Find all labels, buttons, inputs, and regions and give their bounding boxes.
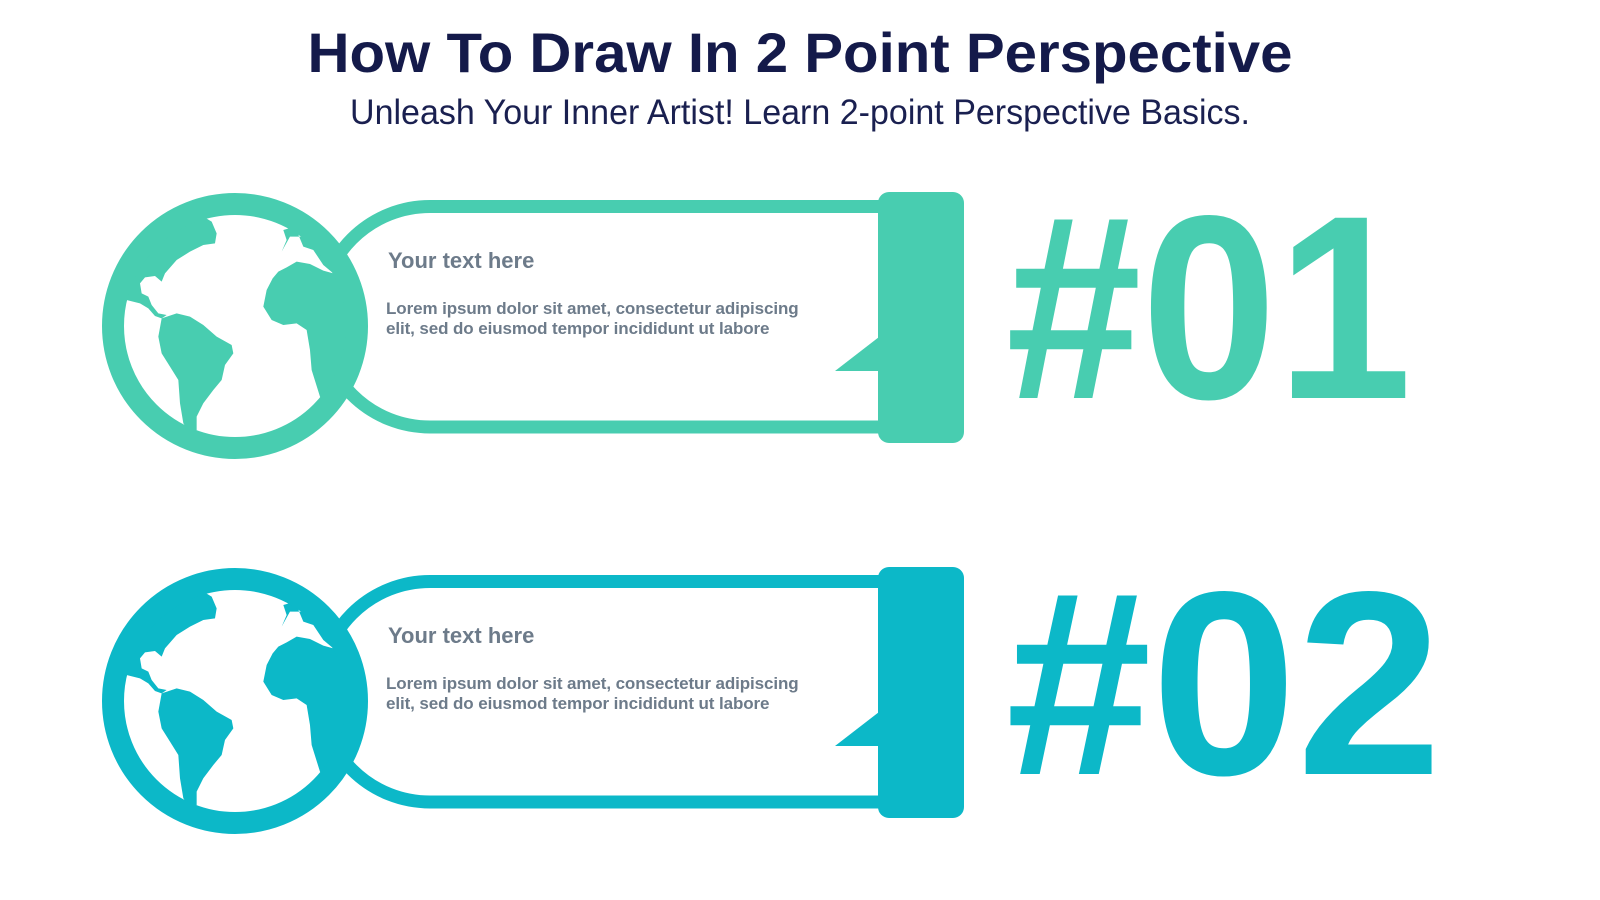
text box frame [320,192,964,443]
number #01: #01 [1006,161,1412,454]
body text: elit, sed do eiusmod tempor incididunt ut labore [386,694,769,713]
icon: globe [110,579,383,823]
text box frame [320,567,964,818]
body text: elit, sed do eiusmod tempor incididunt ut labore [386,319,769,338]
body text: Lorem ipsum dolor sit amet, consectetur adipiscing [386,299,799,318]
icon: globe [110,204,383,448]
title: How To Draw In 2 Point Perspective [308,21,1292,84]
panel: item 02 [110,537,1442,830]
number #02: #02 [1006,537,1442,830]
heading: your text here: Your text here [388,248,534,273]
subtitle: Unleash Your Inner Artist! Learn 2-point Perspective Basics. [350,93,1250,132]
heading: your text here: Your text here [388,623,534,648]
panel: item 01 [110,161,1412,454]
body text: Lorem ipsum dolor sit amet, consectetur adipiscing [386,674,799,693]
